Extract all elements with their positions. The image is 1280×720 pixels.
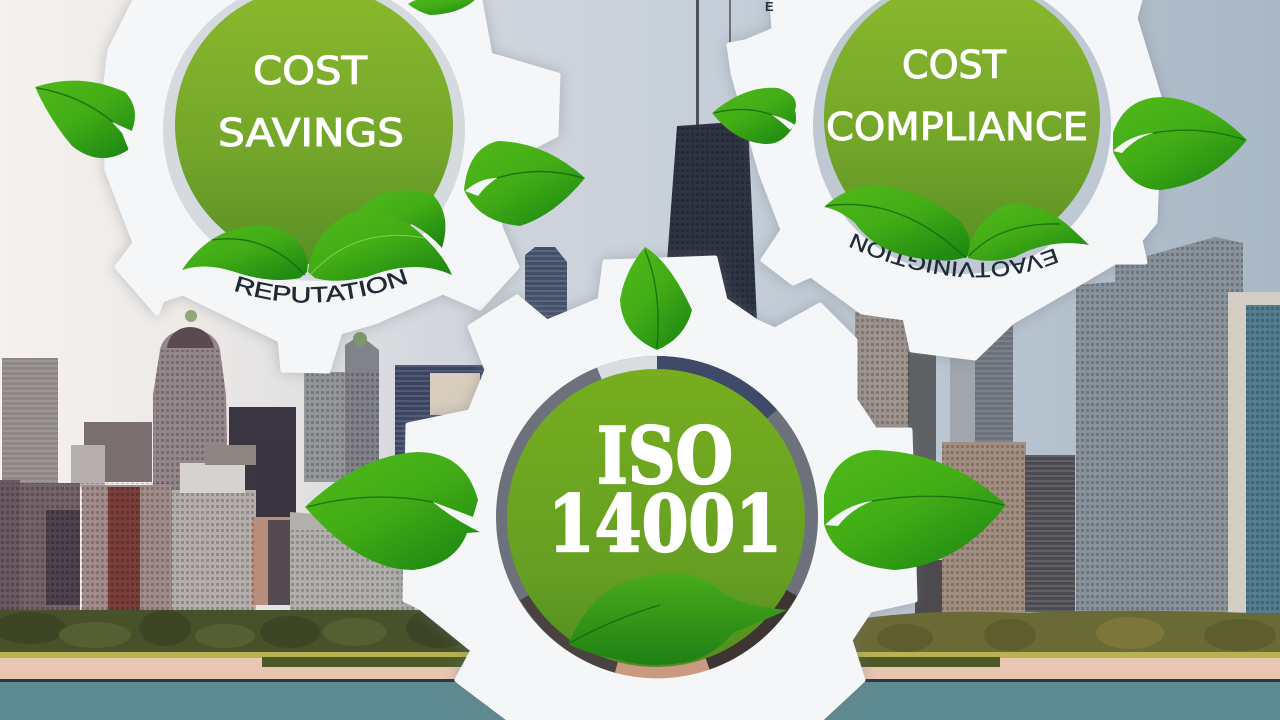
curved label: evaluation: EVAOTVINIGTION <box>849 233 1058 278</box>
gear body <box>729 0 1160 358</box>
green disc <box>175 0 453 264</box>
leaf: left of cost compliance <box>712 88 796 144</box>
leaf cluster <box>824 185 1089 261</box>
label: ISO 14001 <box>548 411 782 570</box>
leaf: top left <box>35 81 137 158</box>
city seen through gear ring <box>504 364 810 670</box>
leaf: right of ISO gear <box>824 450 1006 570</box>
label: cost savings: SAVINGS <box>218 111 404 155</box>
label: cost compliance: COST <box>902 43 1007 87</box>
leaf cluster <box>182 190 452 281</box>
bottom leaf <box>568 574 787 665</box>
leaf: top edge <box>408 0 478 15</box>
label: ISO 14001: ISO <box>597 411 733 502</box>
green disc <box>507 369 805 667</box>
leaf: left of ISO gear <box>305 452 480 570</box>
leaf: top of ISO gear <box>620 247 692 350</box>
curved label: reputation: REPUTATION <box>234 268 408 303</box>
gear: cost compliance <box>722 0 1166 362</box>
label: cost savings <box>218 49 404 155</box>
halo ring <box>163 0 465 281</box>
label: cost savings: COST <box>253 49 368 93</box>
gear: cost savings <box>96 0 566 380</box>
label: ISO 14001: 14001 <box>548 479 782 570</box>
green disc <box>824 0 1100 256</box>
left skyline back row <box>2 310 486 517</box>
leaf: right of compliance <box>1113 97 1247 190</box>
gear body <box>105 0 558 371</box>
halo ring <box>813 0 1111 274</box>
central dark tower <box>667 0 757 322</box>
promenade <box>0 652 1280 682</box>
lakefront trees <box>0 608 1280 660</box>
lake water <box>0 682 1280 720</box>
label: cost compliance: COMPLIANCE <box>826 105 1088 149</box>
gear: ISO 14001 <box>405 258 915 720</box>
label: cost compliance <box>826 43 1088 149</box>
small dark tower <box>525 247 567 322</box>
gear body <box>405 258 915 720</box>
leaf: right of cost savings <box>464 141 585 226</box>
left skyline front row <box>0 440 415 620</box>
right skyline <box>855 237 1280 622</box>
